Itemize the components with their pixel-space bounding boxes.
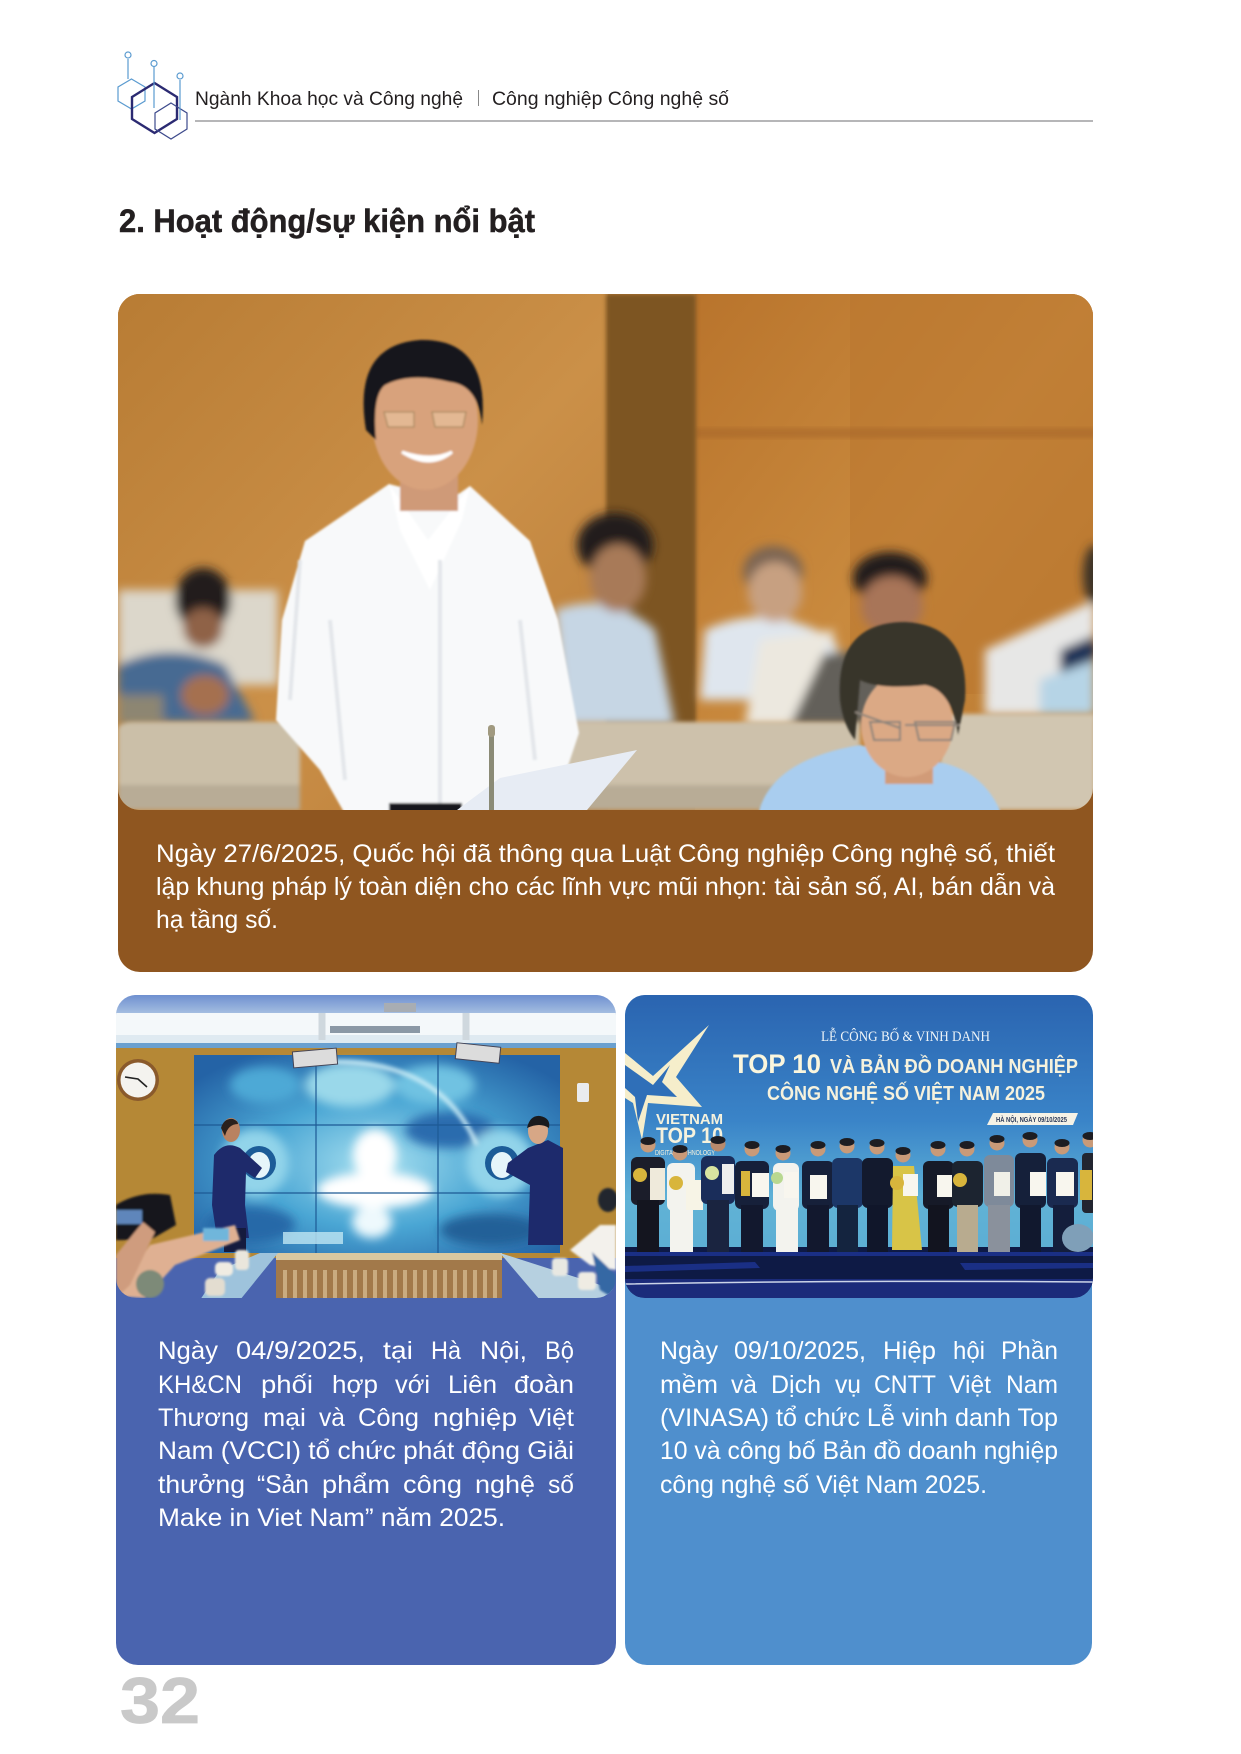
caption: award launch: đoàn [514,1371,574,1399]
header breadcrumb: Ngành Khoa học và Công nghệ [195,88,463,110]
photo: Top 10 honouring ceremony: DIGITAL TECHNOLOGY [655,1150,715,1157]
caption: award launch: “Sản [257,1471,309,1499]
caption: award launch: hợp [332,1371,378,1399]
wooden front panel [276,1253,502,1260]
caption: award launch: 04/9/2025, [236,1337,365,1365]
caption: Top 10: Ngày [660,1337,718,1365]
caption: award launch: Nội, [480,1337,527,1365]
right man [506,1140,563,1245]
icon: hexagon logo [118,52,187,139]
caption: award launch: KH&CN [158,1371,242,1399]
photo: Top 10 honouring ceremony: CÔNG NGHỆ SỐ VIỆT NAM 2025 [767,1081,1045,1105]
caption: award launch: tại [383,1337,413,1365]
caption: award launch: nghệ [475,1471,535,1499]
caption: Top 10: công nghệ số Việt Nam 2025. [660,1471,987,1499]
caption: Top 10: vụ [835,1371,861,1399]
caption: Top 10: (VINASA) tổ chức Lễ vinh danh Top [660,1403,1058,1432]
caption: Top 10: CNTT [874,1371,936,1399]
caption: award launch: với [395,1371,430,1399]
side tables [200,1253,278,1300]
panel: national assembly law [118,294,1107,972]
caption: award launch: Hà [431,1337,461,1365]
caption: award launch: Thương [158,1404,249,1432]
page number: 32 [120,1664,200,1737]
caption: award launch: Việt [529,1404,574,1432]
photo: Top 10 honouring ceremony: TOP 10 [656,1123,723,1148]
header breadcrumb [195,88,1093,122]
caption: Top 10: 09/10/2025, [734,1337,866,1365]
caption: Top 10: và [731,1371,757,1399]
caption: award launch: số [548,1471,574,1499]
caption: Top 10: Hiệp [883,1337,936,1365]
caption: award launch: thưởng [158,1471,245,1499]
caption: award launch: phối [261,1371,313,1399]
caption: award launch: Liên [448,1371,497,1399]
caption: law passed [156,840,1055,934]
caption: award launch: phẩm [322,1471,390,1499]
title: 2. Hoạt động/sự kiện nổi bật [119,203,535,239]
panel: Make in Viet Nam award [116,995,618,1665]
backdrop text: LỄ CÔNG BỐ & VINH DANH [821,1027,990,1045]
audience left [116,1188,618,1300]
caption: Top 10: hội [953,1337,985,1365]
caption: Top 10 [660,1337,1058,1499]
caption: Top 10: mềm [660,1371,718,1399]
photo: Top 10 honouring ceremony [625,995,1098,1300]
caption: award launch [158,1337,574,1532]
caption: award launch: và [319,1404,345,1432]
caption: award launch: mại [263,1404,306,1432]
caption: award launch: Công [358,1404,419,1432]
photo: Top 10 honouring ceremony: VIETNAM [656,1111,723,1128]
photo: award launch ceremony [116,995,618,1300]
caption: Top 10: Dịch [771,1371,821,1399]
caption: law passed: lập khung pháp lý toàn diện cho các lĩnh vực mũi nhọn: tài sản số, AI, bán dẫn và [156,872,1055,901]
header breadcrumb: Công nghiệp Công nghệ số [492,88,729,110]
photo: Top 10 honouring ceremony: HÀ NỘI, NGÀY 09/10/2025 [996,1115,1067,1124]
caption: Top 10: Việt [949,1371,991,1399]
caption: award launch: công [403,1471,462,1499]
caption: award launch: Nam (VCCI) tổ chức phát động Giải [158,1437,574,1465]
caption: award launch: Bộ [545,1337,574,1365]
left man [212,1145,262,1238]
caption: award launch: nghiệp [433,1404,517,1432]
caption: Top 10: 10 và công bố Bản đồ doanh nghiệp [660,1437,1058,1465]
caption: law passed: Ngày 27/6/2025, Quốc hội đã thông qua Luật Công nghiệp Công nghệ số, thiết [156,840,1055,868]
panel: VINASA Top 10 [625,995,1098,1665]
star logo [625,1025,709,1140]
clock [117,1059,159,1101]
photo: speaker at the National Assembly [118,294,1107,815]
photo: Top 10 honouring ceremony: VÀ BẢN ĐỒ DOANH NGHIỆP [830,1054,1078,1078]
award recipients [631,1132,1098,1252]
photo: Top 10 honouring ceremony: TOP 10 [733,1049,821,1079]
caption: award launch: Make in Viet Nam” năm 2025. [158,1504,505,1532]
stage [625,1247,1093,1297]
caption: Top 10: Phần [1001,1337,1058,1365]
caption: law passed: hạ tầng số. [156,906,278,934]
caption: Top 10: Nam [1006,1371,1058,1399]
caption: award launch: Ngày [158,1337,219,1365]
